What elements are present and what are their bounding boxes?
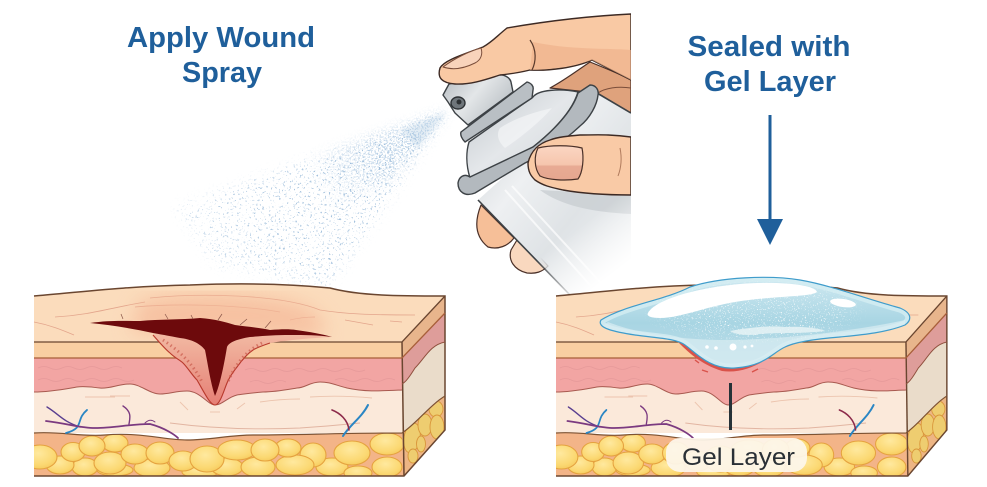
dome highlight: [498, 108, 552, 148]
gel highlights: [648, 283, 817, 318]
title: Apply Wound Spray: Apply Wound: [127, 22, 315, 54]
can body: [478, 93, 640, 295]
upper collar ring: [461, 82, 533, 142]
title: Sealed with Gel Layer: Sealed with: [688, 31, 850, 63]
label: Gel Layer: Gel Layer: [682, 444, 795, 471]
lower crimp ring: [458, 85, 598, 194]
lower fingers: [477, 205, 548, 273]
callout line: [729, 383, 732, 430]
index finger: [439, 14, 631, 84]
nozzle opening: [451, 97, 465, 109]
wound surrounding skin glow: [130, 295, 325, 336]
aerosol can and hand: [439, 14, 640, 295]
can shoulder dome: [467, 90, 578, 178]
thumb: [528, 135, 631, 195]
gel blob: [600, 277, 910, 370]
skin cross-section: open wound: [23, 284, 445, 480]
skin cross-section: sealed wound with gel: [546, 277, 947, 480]
palm behind can: [550, 62, 631, 114]
red tissue beneath gel: [676, 340, 800, 371]
spray mist: [170, 100, 455, 290]
arrow: down to gel layer: [757, 115, 783, 245]
spray nozzle: [443, 75, 513, 125]
title: Sealed with Gel Layer: Gel Layer: [704, 66, 836, 98]
label: Gel Layer: [666, 438, 807, 472]
title: Sealed with Gel Layer: [688, 31, 850, 98]
title: Apply Wound Spray: Spray: [182, 57, 262, 89]
wound funnel: [153, 322, 332, 405]
title: Apply Wound Spray: [127, 22, 315, 89]
